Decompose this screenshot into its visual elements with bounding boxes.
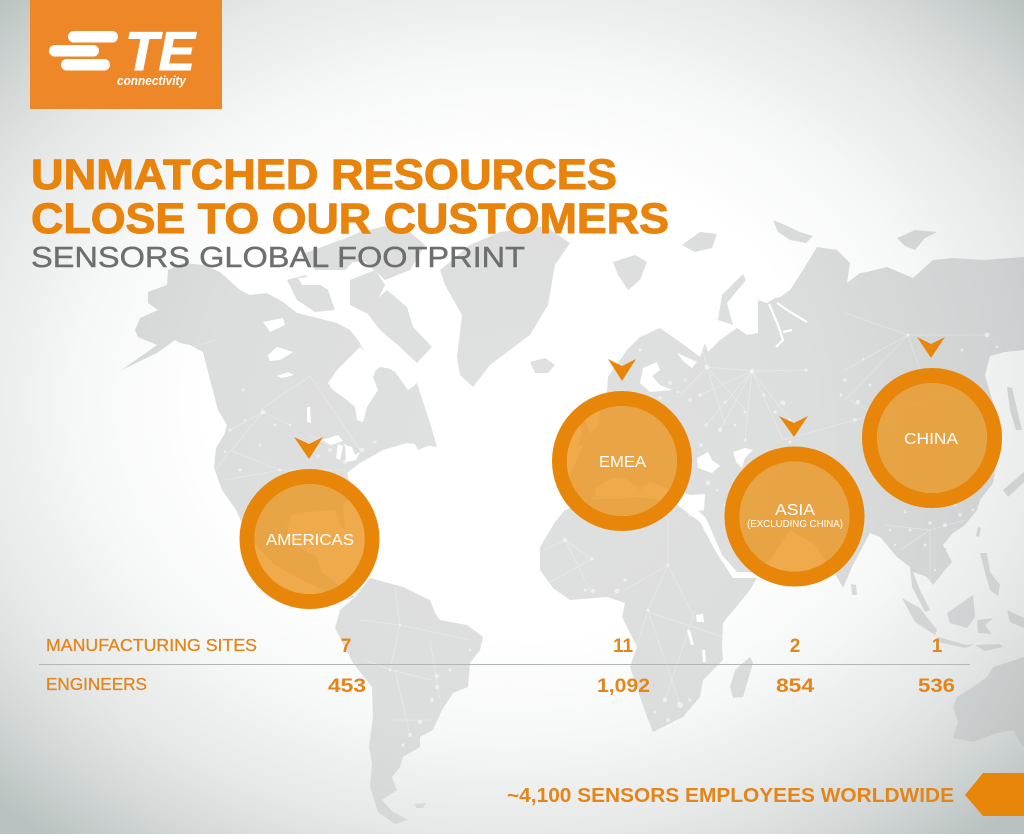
data table bbox=[39, 635, 970, 697]
label: Americas: AMERICAS bbox=[266, 532, 354, 549]
region marker: EMEA bbox=[560, 359, 684, 524]
title: CLOSE TO OUR CUSTOMERS bbox=[31, 195, 669, 243]
world map bbox=[120, 220, 1024, 824]
map: Africa bbox=[540, 497, 757, 732]
label: excluding China: (EXCLUDING CHINA) bbox=[747, 519, 843, 530]
engineer counts: 536 bbox=[918, 676, 955, 697]
arrow: EMEA bbox=[608, 359, 636, 381]
arrow: China bbox=[917, 337, 945, 358]
map: Greenland and Iceland bbox=[440, 226, 570, 387]
map: inland seas bbox=[595, 353, 753, 513]
arrow: Americas bbox=[294, 437, 323, 459]
circle: Asia bbox=[732, 454, 857, 579]
row label: manufacturing sites: MANUFACTURING SITES bbox=[46, 635, 257, 655]
map: Eurasia bbox=[565, 220, 1024, 612]
label: EMEA: EMEA bbox=[599, 454, 646, 471]
map: Siberian gulfs bbox=[769, 303, 807, 347]
map: network nodes bbox=[224, 333, 998, 747]
map: network lines bbox=[120, 313, 987, 735]
label: Asia: ASIA bbox=[775, 502, 815, 519]
row label: engineers: ENGINEERS bbox=[46, 674, 147, 694]
map: Southeast Asia and Oceania bbox=[902, 553, 1024, 747]
region marker: Asia bbox=[732, 416, 857, 579]
map: South America bbox=[335, 578, 483, 824]
logo: TE connectivity bbox=[30, 0, 222, 109]
region marker: China bbox=[870, 337, 994, 500]
manufacturing site counts: 1 bbox=[932, 636, 943, 657]
manufacturing site counts: 7 bbox=[341, 636, 351, 657]
manufacturing site counts: 2 bbox=[790, 636, 800, 657]
logo tagline: connectivity bbox=[117, 74, 187, 88]
engineer counts bbox=[328, 676, 955, 697]
subtitle: SENSORS GLOBAL FOOTPRINT bbox=[31, 242, 525, 274]
map: North American lakes and Hudson Bay bbox=[263, 276, 415, 468]
manufacturing site counts bbox=[341, 636, 943, 657]
engineer counts: 854 bbox=[776, 676, 815, 697]
circle: Americas bbox=[247, 476, 372, 602]
label: China: CHINA bbox=[904, 431, 958, 448]
arrow: callout tab bbox=[965, 773, 1024, 816]
engineer counts: 1,092 bbox=[597, 676, 650, 697]
circle: EMEA bbox=[560, 398, 684, 524]
engineer counts: 453 bbox=[328, 676, 366, 697]
title: UNMATCHED RESOURCES bbox=[31, 151, 617, 199]
logo wordmark: TE bbox=[125, 20, 197, 82]
circle: China bbox=[870, 376, 994, 500]
map: North America bbox=[120, 226, 437, 602]
title bbox=[31, 151, 669, 243]
manufacturing site counts: 11 bbox=[613, 636, 633, 657]
icon: TE logo stripes bbox=[49, 31, 118, 70]
arrow: Asia bbox=[779, 416, 808, 437]
region marker: Americas bbox=[247, 437, 372, 602]
callout: employees worldwide: ~4,100 SENSORS EMPLOYEES WORLDWIDE bbox=[507, 785, 954, 807]
